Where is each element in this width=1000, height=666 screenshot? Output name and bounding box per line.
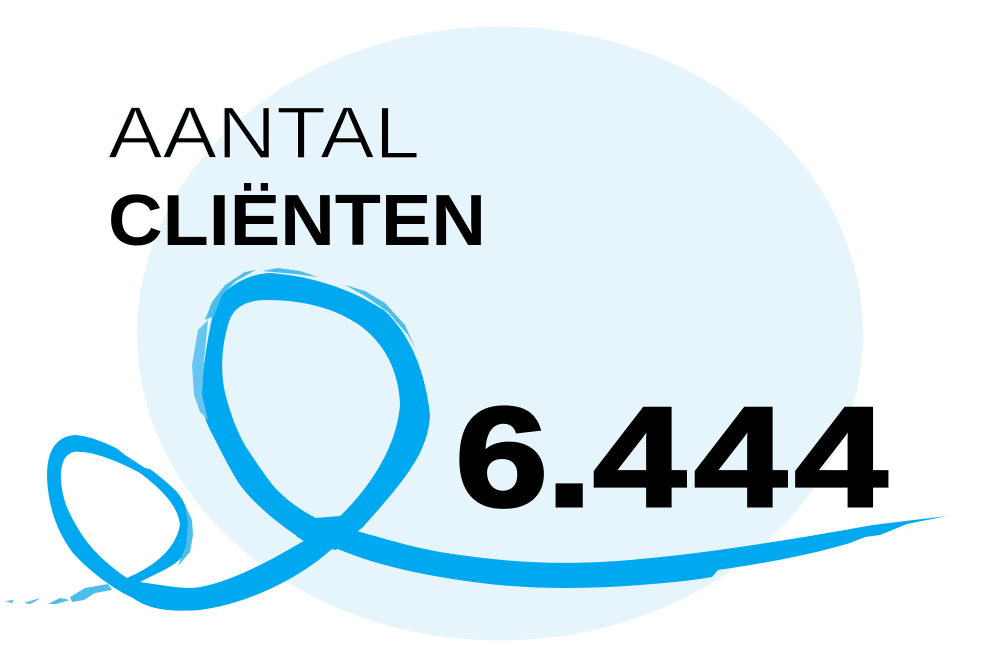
small ribbon loop and left tail <box>47 435 333 611</box>
ribbon crossing <box>296 516 364 550</box>
pale blue background circle <box>137 26 863 640</box>
wisps on small loop <box>110 443 162 472</box>
heading line: aantal: AANTAL <box>108 93 420 174</box>
number: client count: 6.444 <box>455 377 888 536</box>
ribbon tail to the right <box>333 516 947 588</box>
heading line: clienten: CLIËNTEN <box>108 181 486 261</box>
wisps on large loop <box>205 270 256 320</box>
dry brush wisps <box>5 268 416 604</box>
heading: aantal clienten <box>108 93 486 261</box>
wisps on the far left <box>5 600 14 603</box>
large ribbon loop <box>202 273 430 538</box>
icon: brush stroke ribbon <box>5 268 947 611</box>
